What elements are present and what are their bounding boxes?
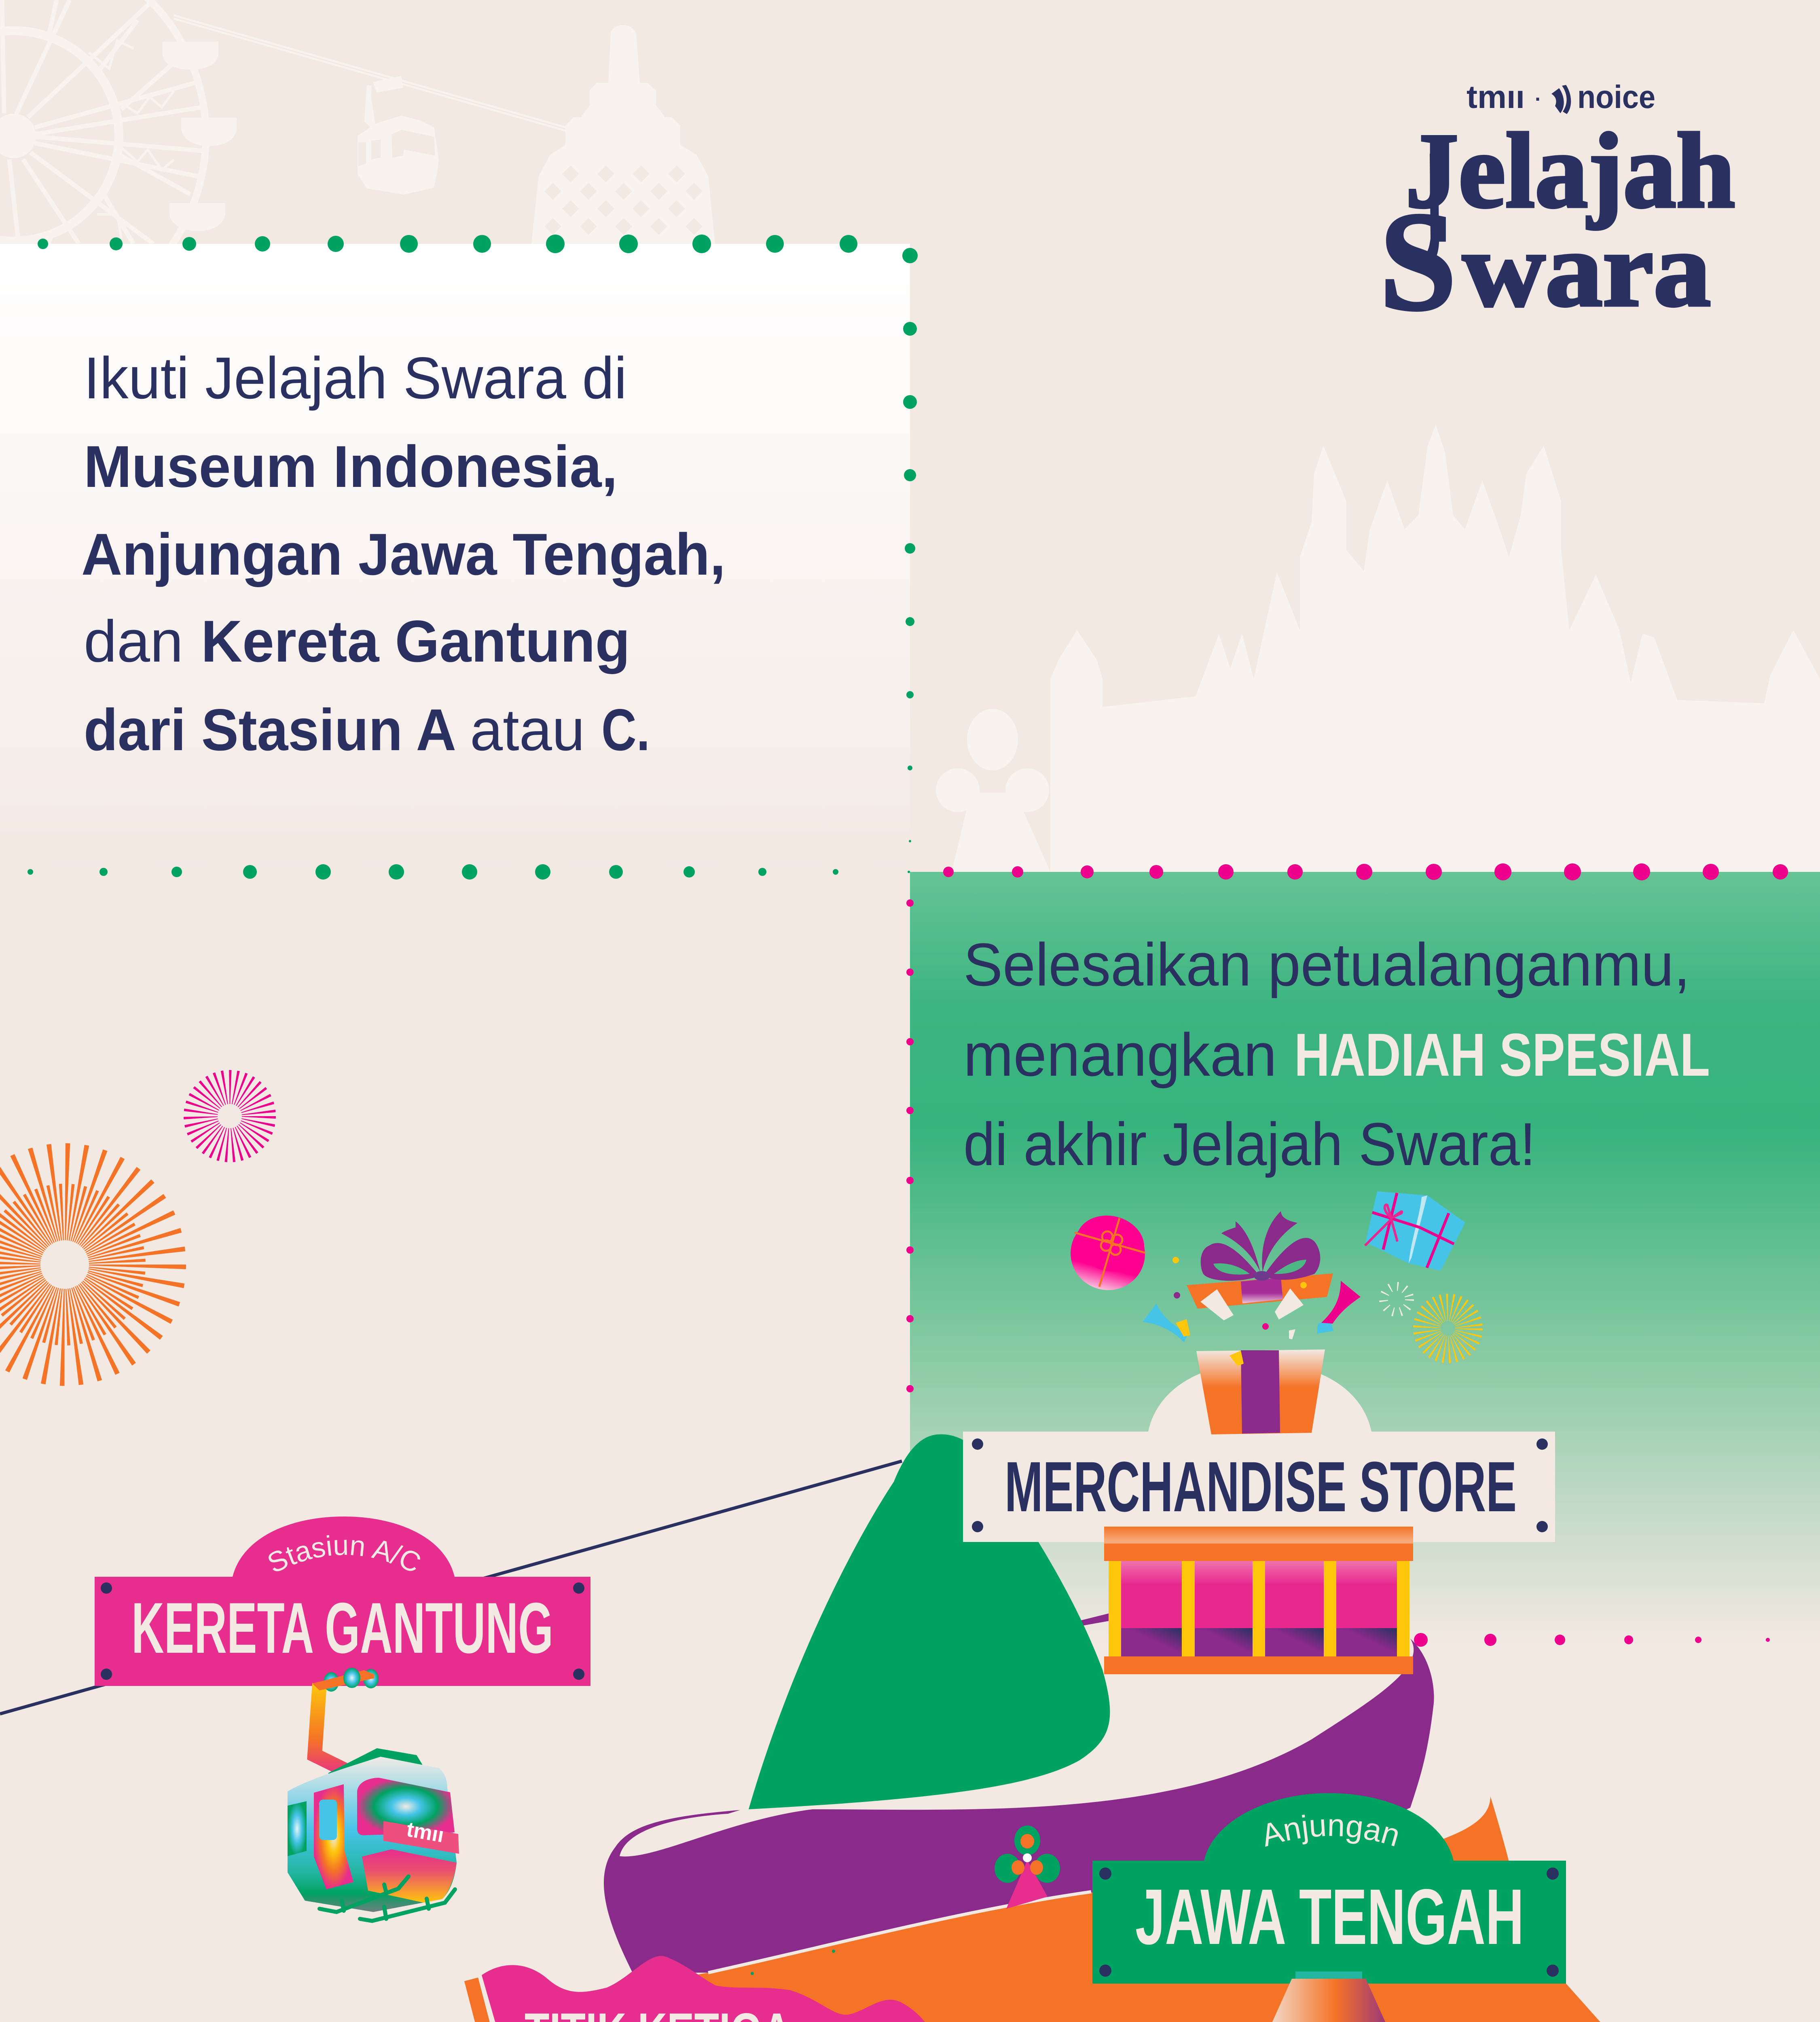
merchandise sign: MERCHANDISE STORE xyxy=(1005,1447,1517,1527)
text: intro copy: Museum Indonesia, xyxy=(84,434,618,499)
silhouette: castle xyxy=(1050,425,1820,872)
sign: Jawa Tengah xyxy=(1092,1793,1566,1984)
sign: Kereta Gantung: Stasiun A/C xyxy=(262,1529,426,1579)
text: intro copy: Ikuti Jelajah Swara di xyxy=(84,345,627,411)
hill: top green xyxy=(749,1434,1110,1809)
road: upper bend xyxy=(620,1618,1414,1857)
logo: sponsor names xyxy=(1467,79,1655,115)
cable line xyxy=(0,1461,902,1714)
text: intro copy: dari Stasiun A xyxy=(84,697,456,763)
gift group xyxy=(963,1191,1555,1542)
hill: purple road band xyxy=(604,1639,1434,1973)
building: joglo Jawa Tengah xyxy=(1092,1793,1566,2022)
text: prize copy: di akhir Jelajah Swara! xyxy=(963,1110,1536,1178)
logo: Jelajah Swara wordmark: wara xyxy=(1462,210,1711,329)
logo: Jelajah Swara wordmark: S xyxy=(1380,183,1456,340)
text: intro copy: Kereta Gantung xyxy=(201,608,630,674)
icon: cable car: tmıı xyxy=(405,1818,446,1847)
text: prize copy: menangkan xyxy=(963,1021,1277,1089)
firework: orange xyxy=(0,1192,138,1337)
panel: green prize xyxy=(910,872,1820,1644)
purple sliver near store xyxy=(1076,1612,1116,1626)
icon: yellow firework xyxy=(1427,1307,1469,1349)
logo: Jelajah Swara wordmark xyxy=(1380,112,1735,340)
logo: sponsor names: noice xyxy=(1577,79,1655,115)
sign: Jawa Tengah: JAWA TENGAH xyxy=(1135,1873,1524,1961)
text: intro copy: C. xyxy=(601,697,650,763)
flag: Titik Ketiga xyxy=(464,1956,934,2022)
hill: orange xyxy=(603,1796,1723,2022)
text: intro copy: atau xyxy=(470,697,585,763)
text: prize copy: HADIAH SPESIAL xyxy=(1294,1021,1710,1089)
logo: sponsor names: · xyxy=(1535,88,1542,110)
silhouette: stupa xyxy=(531,25,715,244)
icon: pink round gift xyxy=(1063,1208,1153,1298)
sign: Jawa Tengah: Anjungan xyxy=(1257,1807,1404,1853)
logo xyxy=(1380,79,1735,340)
silhouette: cable car xyxy=(174,15,565,195)
panel: white intro xyxy=(0,244,910,872)
text: intro copy: dan xyxy=(84,608,183,674)
confetti xyxy=(1143,1257,1361,1342)
logo: sponsor names: tmıı xyxy=(1467,79,1525,115)
icon: cable car xyxy=(288,1668,459,1921)
text: prize copy xyxy=(963,931,1710,1178)
logo: Jelajah Swara wordmark: Jelajah xyxy=(1405,112,1735,230)
sign: Kereta Gantung xyxy=(95,1516,590,1686)
icon: blue gift xyxy=(1365,1191,1465,1271)
text: prize copy: Selesaikan petualanganmu, xyxy=(963,931,1690,998)
icon: flower tree small xyxy=(995,1825,1060,1909)
silhouette: ferris wheel xyxy=(0,0,237,244)
gift box body xyxy=(1196,1349,1325,1434)
store building xyxy=(1104,1527,1413,1674)
icon: swirl firework xyxy=(1384,1286,1409,1312)
dotted border: pink xyxy=(906,863,1788,1647)
merchandise sign xyxy=(963,1363,1555,1542)
road route dots xyxy=(579,1950,1561,2022)
firework: pink xyxy=(201,1087,259,1145)
text: intro copy xyxy=(81,345,726,763)
text: intro copy: Anjungan Jawa Tengah, xyxy=(81,521,726,587)
dotted border: green top xyxy=(28,235,918,880)
silhouette: gunungan xyxy=(936,709,1050,872)
gift lid and bow xyxy=(1187,1211,1333,1309)
sign: Kereta Gantung: KERETA GANTUNG xyxy=(131,1588,553,1668)
